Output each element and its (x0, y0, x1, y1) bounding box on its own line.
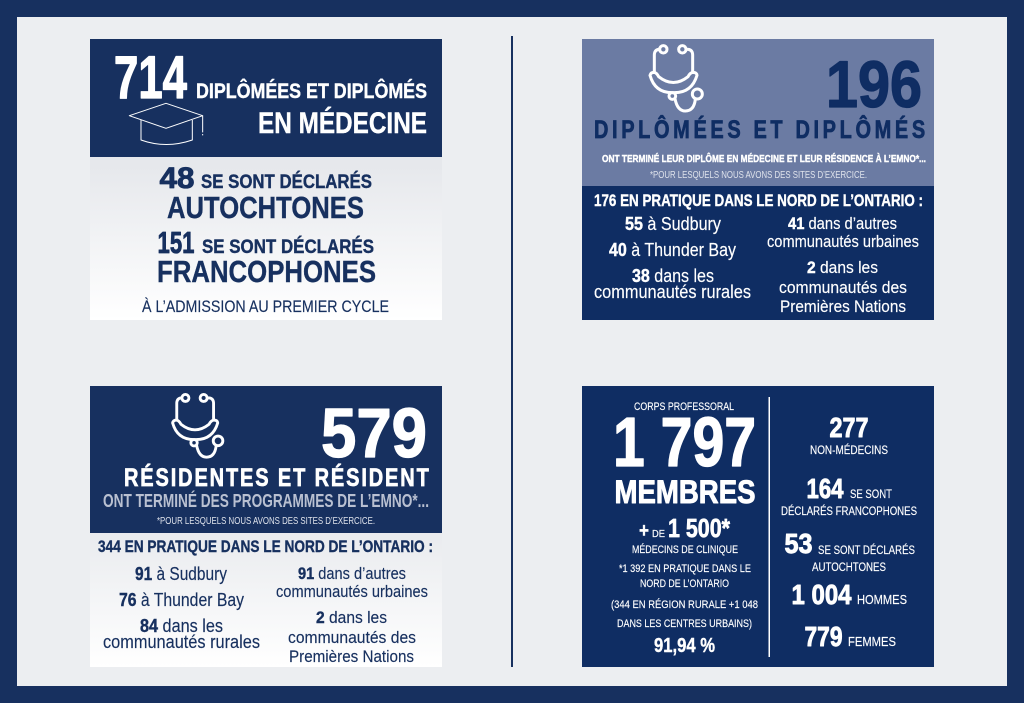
panel: graduates in medicine (90, 39, 442, 320)
practice locations, right column: communautés urbaines (767, 232, 919, 251)
footnote: *POUR LESQUELS NOUS AVONS DES SITES D’EXERCICE. (157, 516, 375, 527)
headline number 579: 579 (321, 394, 427, 472)
practice locations, right column (767, 214, 919, 316)
faculty headline: 1 797 (613, 403, 756, 481)
stat: 48 indigenous: 48 (160, 162, 194, 195)
headline label: DIPLÔMÉES ET DIPLÔMÉS (594, 116, 925, 144)
practice locations, left column: 76 à Thunder Bay (119, 590, 244, 610)
practice heading: 176 EN PRATIQUE DANS LE NORD DE L’ONTARIO : (594, 191, 923, 210)
stat: women: FEMMES (848, 635, 896, 649)
icon: graduation cap (129, 103, 203, 144)
stat: 151 francophone: 151 (158, 225, 194, 260)
faculty headline: MEMBRES (614, 474, 756, 510)
panel: MD and residency graduates (582, 39, 934, 320)
clinical physicians: DE (652, 529, 665, 540)
stat: men: 1 004 (792, 579, 852, 610)
stat: francophone faculty: 164 (806, 473, 844, 504)
practice locations, left column: 84 dans les (140, 616, 223, 636)
subheading: ONT TERMINÉ LEUR DIPLÔME EN MÉDECINE ET LEUR RÉSIDENCE À L’EMNO*... (602, 152, 926, 165)
clinical physicians: 91,94 % (654, 635, 715, 657)
practice locations, right column (276, 564, 428, 666)
clinical physicians: *1 392 EN PRATIQUE DANS LE (619, 563, 751, 575)
practice locations, right column: 91 dans d’autres (298, 564, 406, 583)
clinical physicians (611, 513, 758, 657)
subheading: ONT TERMINÉ DES PROGRAMMES DE L’EMNO*... (103, 490, 429, 511)
icon: stethoscope (650, 46, 702, 111)
stat: indigenous faculty: SE SONT DÉCLARÉS (818, 544, 915, 557)
stat: men: HOMMES (857, 593, 907, 607)
stat: 48 indigenous: SE SONT DÉCLARÉS (201, 171, 372, 193)
practice locations, left column: 55 à Sudbury (625, 214, 721, 234)
stat: women: 779 (804, 621, 842, 652)
headline number 714: 714 (114, 44, 187, 111)
stat: men (792, 579, 907, 610)
headline label: RÉSIDENTES ET RÉSIDENT (124, 464, 429, 492)
stat: non-physicians: 277 (830, 412, 868, 443)
stat: 151 francophone: SE SONT DÉCLARÉS (202, 236, 374, 258)
practice locations, left column (103, 564, 260, 652)
practice locations, right column: 41 dans d’autres (788, 214, 897, 233)
panel: faculty (582, 386, 934, 667)
faculty headline (613, 401, 756, 510)
clinical physicians: MÉDECINS DE CLINIQUE (632, 543, 738, 556)
panel: residents (90, 386, 442, 667)
stat: non-physicians (810, 412, 888, 457)
practice locations, right column: communautés urbaines (276, 582, 428, 601)
faculty divider (768, 397, 770, 657)
headline number 196: 196 (826, 47, 922, 121)
clinical physicians: NORD DE L’ONTARIO (640, 578, 729, 590)
stat: 151 francophone (157, 225, 376, 289)
central divider (511, 36, 513, 667)
practice locations, left column: 40 à Thunder Bay (609, 240, 736, 260)
practice locations, left column: communautés rurales (594, 282, 751, 302)
headline label: DIPLÔMÉES ET DIPLÔMÉS (196, 79, 427, 103)
stat: francophone faculty: DÉCLARÉS FRANCOPHONES (781, 505, 917, 518)
clinical physicians: 1 500* (668, 513, 731, 543)
practice locations, right column: Premières Nations (289, 647, 414, 666)
practice locations, right column: communautés des (288, 628, 416, 647)
stat: francophone faculty (781, 473, 917, 518)
practice locations, right column: 2 dans les (807, 258, 878, 277)
stat: 151 francophone: FRANCOPHONES (157, 254, 376, 289)
stat: indigenous faculty (784, 528, 915, 574)
clinical physicians: (344 EN RÉGION RURALE +1 048 (611, 598, 758, 611)
stat: indigenous faculty: AUTOCHTONES (812, 562, 886, 574)
admission note: À L’ADMISSION AU PREMIER CYCLE (142, 297, 389, 316)
practice locations, left column: 38 dans les (632, 266, 714, 286)
practice locations, left column: communautés rurales (103, 632, 260, 652)
practice locations, right column: communautés des (779, 278, 907, 297)
headline subtitle: EN MÉDECINE (258, 106, 427, 140)
stat: women (804, 621, 896, 652)
stat: 48 indigenous (160, 162, 372, 225)
icon: stethoscope (173, 394, 223, 457)
clinical physicians: DANS LES CENTRES URBAINS) (617, 618, 752, 630)
practice locations, right column: Premières Nations (780, 297, 906, 316)
practice locations, left column (594, 214, 751, 302)
stat: non-physicians: NON-MÉDECINS (810, 444, 888, 457)
practice locations, right column: 2 dans les (316, 608, 387, 627)
practice heading: 344 EN PRATIQUE DANS LE NORD DE L’ONTARIO : (98, 537, 433, 556)
faculty headline: CORPS PROFESSORAL (634, 401, 734, 413)
footnote: *POUR LESQUELS NOUS AVONS DES SITES D’EXERCICE. (650, 170, 867, 181)
practice locations, left column: 91 à Sudbury (135, 564, 227, 584)
clinical physicians: + (639, 520, 649, 542)
stat: francophone faculty: SE SONT (850, 489, 892, 501)
stat: 48 indigenous: AUTOCHTONES (167, 190, 364, 225)
stat: indigenous faculty: 53 (784, 528, 812, 559)
